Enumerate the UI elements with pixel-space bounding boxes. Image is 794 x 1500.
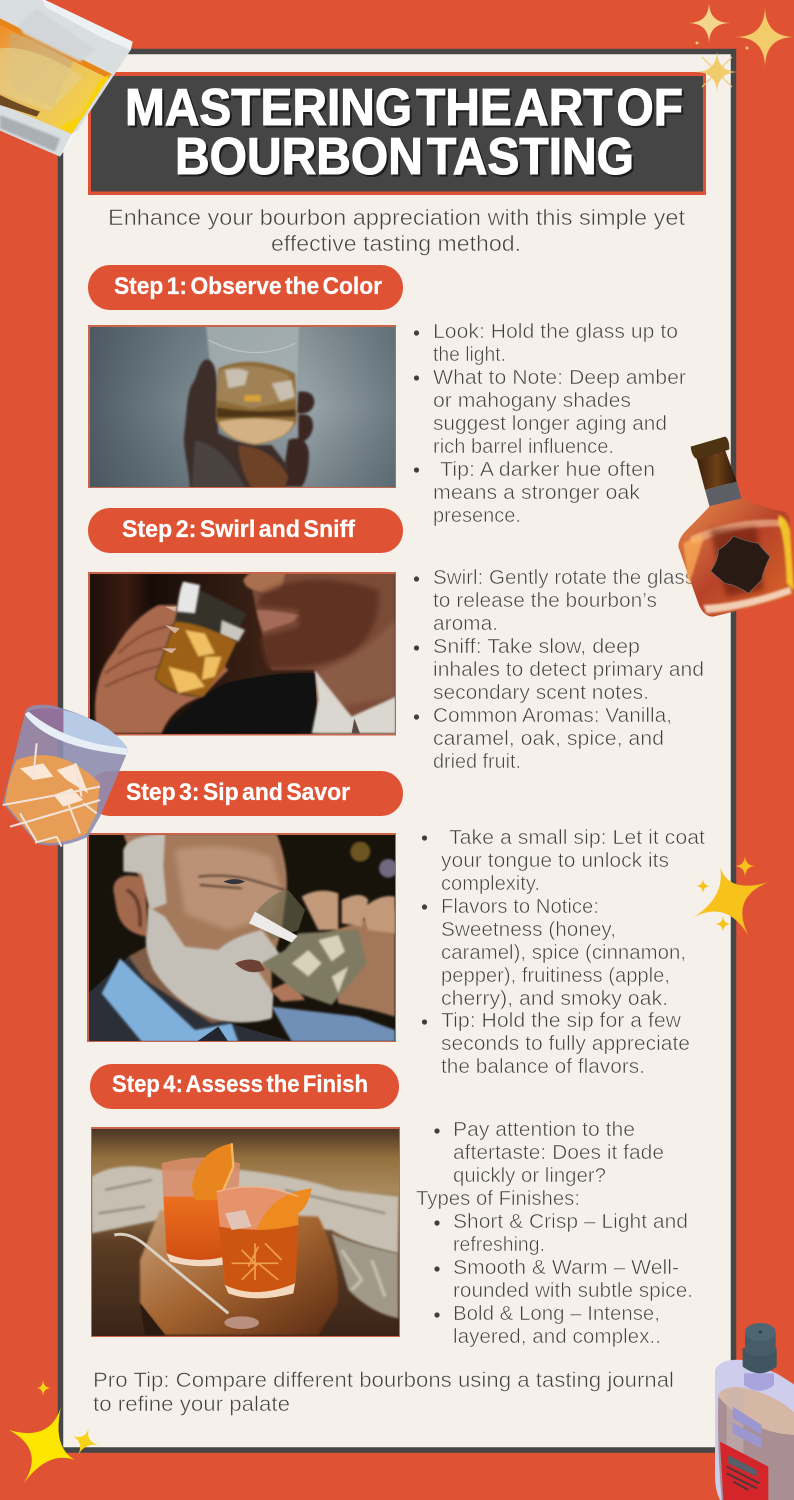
step 4 text: refreshing. <box>453 1233 545 1256</box>
step 4 text: Bold & Long – Intense, <box>453 1302 660 1325</box>
step 1 text: presence. <box>433 504 521 527</box>
step 1 heading <box>88 265 403 310</box>
step 4 text: Short & Crisp – Light and <box>453 1210 688 1233</box>
step 4 text: layered, and complex.. <box>453 1325 661 1348</box>
step 1 text: Tip: A darker hue often <box>440 458 655 481</box>
step 3 text: pepper), fruitiness (apple, <box>441 964 670 987</box>
title banner: BOURBON TASTING <box>177 130 636 188</box>
step 1 text: the light. <box>433 343 506 366</box>
step 3 text: caramel), spice (cinnamon, <box>441 941 686 964</box>
step 4 text: rounded with subtle spice. <box>453 1279 693 1302</box>
step 2 heading: Step 2: Swirl and Sniff <box>122 516 356 543</box>
step 2 text: caramel, oak, spice, and <box>433 727 664 750</box>
icon: gold sparkles top right <box>688 2 794 94</box>
step 4 text: aftertaste: Does it fade <box>453 1141 664 1164</box>
step 3 heading: Step 3: Sip and Savor <box>126 779 350 806</box>
pro tip: Pro Tip: Compare different bourbons using a tasting journal <box>93 1368 674 1392</box>
step 4 text: quickly or linger? <box>453 1164 606 1187</box>
step 4 text: Types of Finishes: <box>416 1187 580 1210</box>
step 3 text: your tongue to unlock its <box>441 849 669 872</box>
subtitle: Enhance your bourbon appreciation with this simple yet <box>108 205 686 230</box>
title banner: BOURBON TASTING <box>175 128 634 186</box>
subtitle: effective tasting method. <box>271 231 521 256</box>
step 2 text: aroma. <box>433 612 498 635</box>
step 2 text: secondary scent notes. <box>433 681 649 704</box>
step 1 text: suggest longer aging and <box>433 412 667 435</box>
step 3 text: Sweetness (honey, <box>441 918 616 941</box>
photo: two orange cocktails on a board <box>91 1127 400 1337</box>
icon: bourbon bottle right <box>678 437 794 617</box>
photo: hand holding glass to the light <box>88 323 396 488</box>
step 2 text: to release the bourbon’s <box>433 589 657 612</box>
photo: older man sipping <box>87 833 398 1043</box>
step 1 text: rich barrel influence. <box>433 435 614 458</box>
step 1 heading: Step 1: Observe the Color <box>114 273 382 300</box>
step 4 heading <box>90 1064 399 1109</box>
step 2 text: dried fruit. <box>433 750 521 773</box>
step 3 text: seconds to fully appreciate <box>441 1032 690 1055</box>
icon: yellow sparkles bottom left <box>9 1379 98 1484</box>
title banner: MASTERING THE ART OF <box>125 79 683 137</box>
icon: lavender bottle bottom right <box>715 1323 794 1500</box>
title banner <box>88 72 706 195</box>
step 3 text: complexity. <box>441 872 540 895</box>
icon: whiskey glass top left <box>0 0 133 157</box>
step 1 text: What to Note: Deep amber <box>433 366 686 389</box>
step 3 text: Take a small sip: Let it coat <box>449 826 705 849</box>
step 1 text <box>414 320 686 527</box>
panel: main frame <box>60 52 734 1450</box>
step 1 text: or mahogany shades <box>433 389 631 412</box>
step 1 text: Look: Hold the glass up to <box>433 320 678 343</box>
pro tip <box>93 1368 674 1416</box>
icon: cut crystal glass left <box>3 705 128 847</box>
title banner: MASTERING THE ART OF <box>127 81 685 139</box>
step 4 heading: Step 4: Assess the Finish <box>112 1071 368 1098</box>
step 3 text <box>422 826 705 1078</box>
pro tip: to refine your palate <box>93 1392 290 1416</box>
step 2 text: Common Aromas: Vanilla, <box>433 704 672 727</box>
step 2 heading <box>88 508 403 553</box>
step 2 text: Swirl: Gently rotate the glass <box>433 566 695 589</box>
step 2 text: inhales to detect primary and <box>433 658 704 681</box>
step 3 heading <box>88 771 403 816</box>
icon: yellow sparkles right <box>694 855 769 935</box>
step 3 text: cherry), and smoky oak. <box>441 987 668 1010</box>
subtitle <box>108 205 686 256</box>
step 4 text: Smooth & Warm – Well- <box>453 1256 679 1279</box>
step 2 text: Sniff: Take slow, deep <box>433 635 640 658</box>
step 2 text <box>414 566 704 773</box>
photo: man sniffing glass <box>88 572 396 736</box>
step 3 text: the balance of flavors. <box>441 1055 645 1078</box>
step 3 text: Flavors to Notice: <box>441 895 599 918</box>
step 4 text <box>416 1118 693 1348</box>
step 1 text: means a stronger oak <box>433 481 641 504</box>
step 3 text: Tip: Hold the sip for a few <box>441 1009 681 1032</box>
step 4 text: Pay attention to the <box>453 1118 635 1141</box>
